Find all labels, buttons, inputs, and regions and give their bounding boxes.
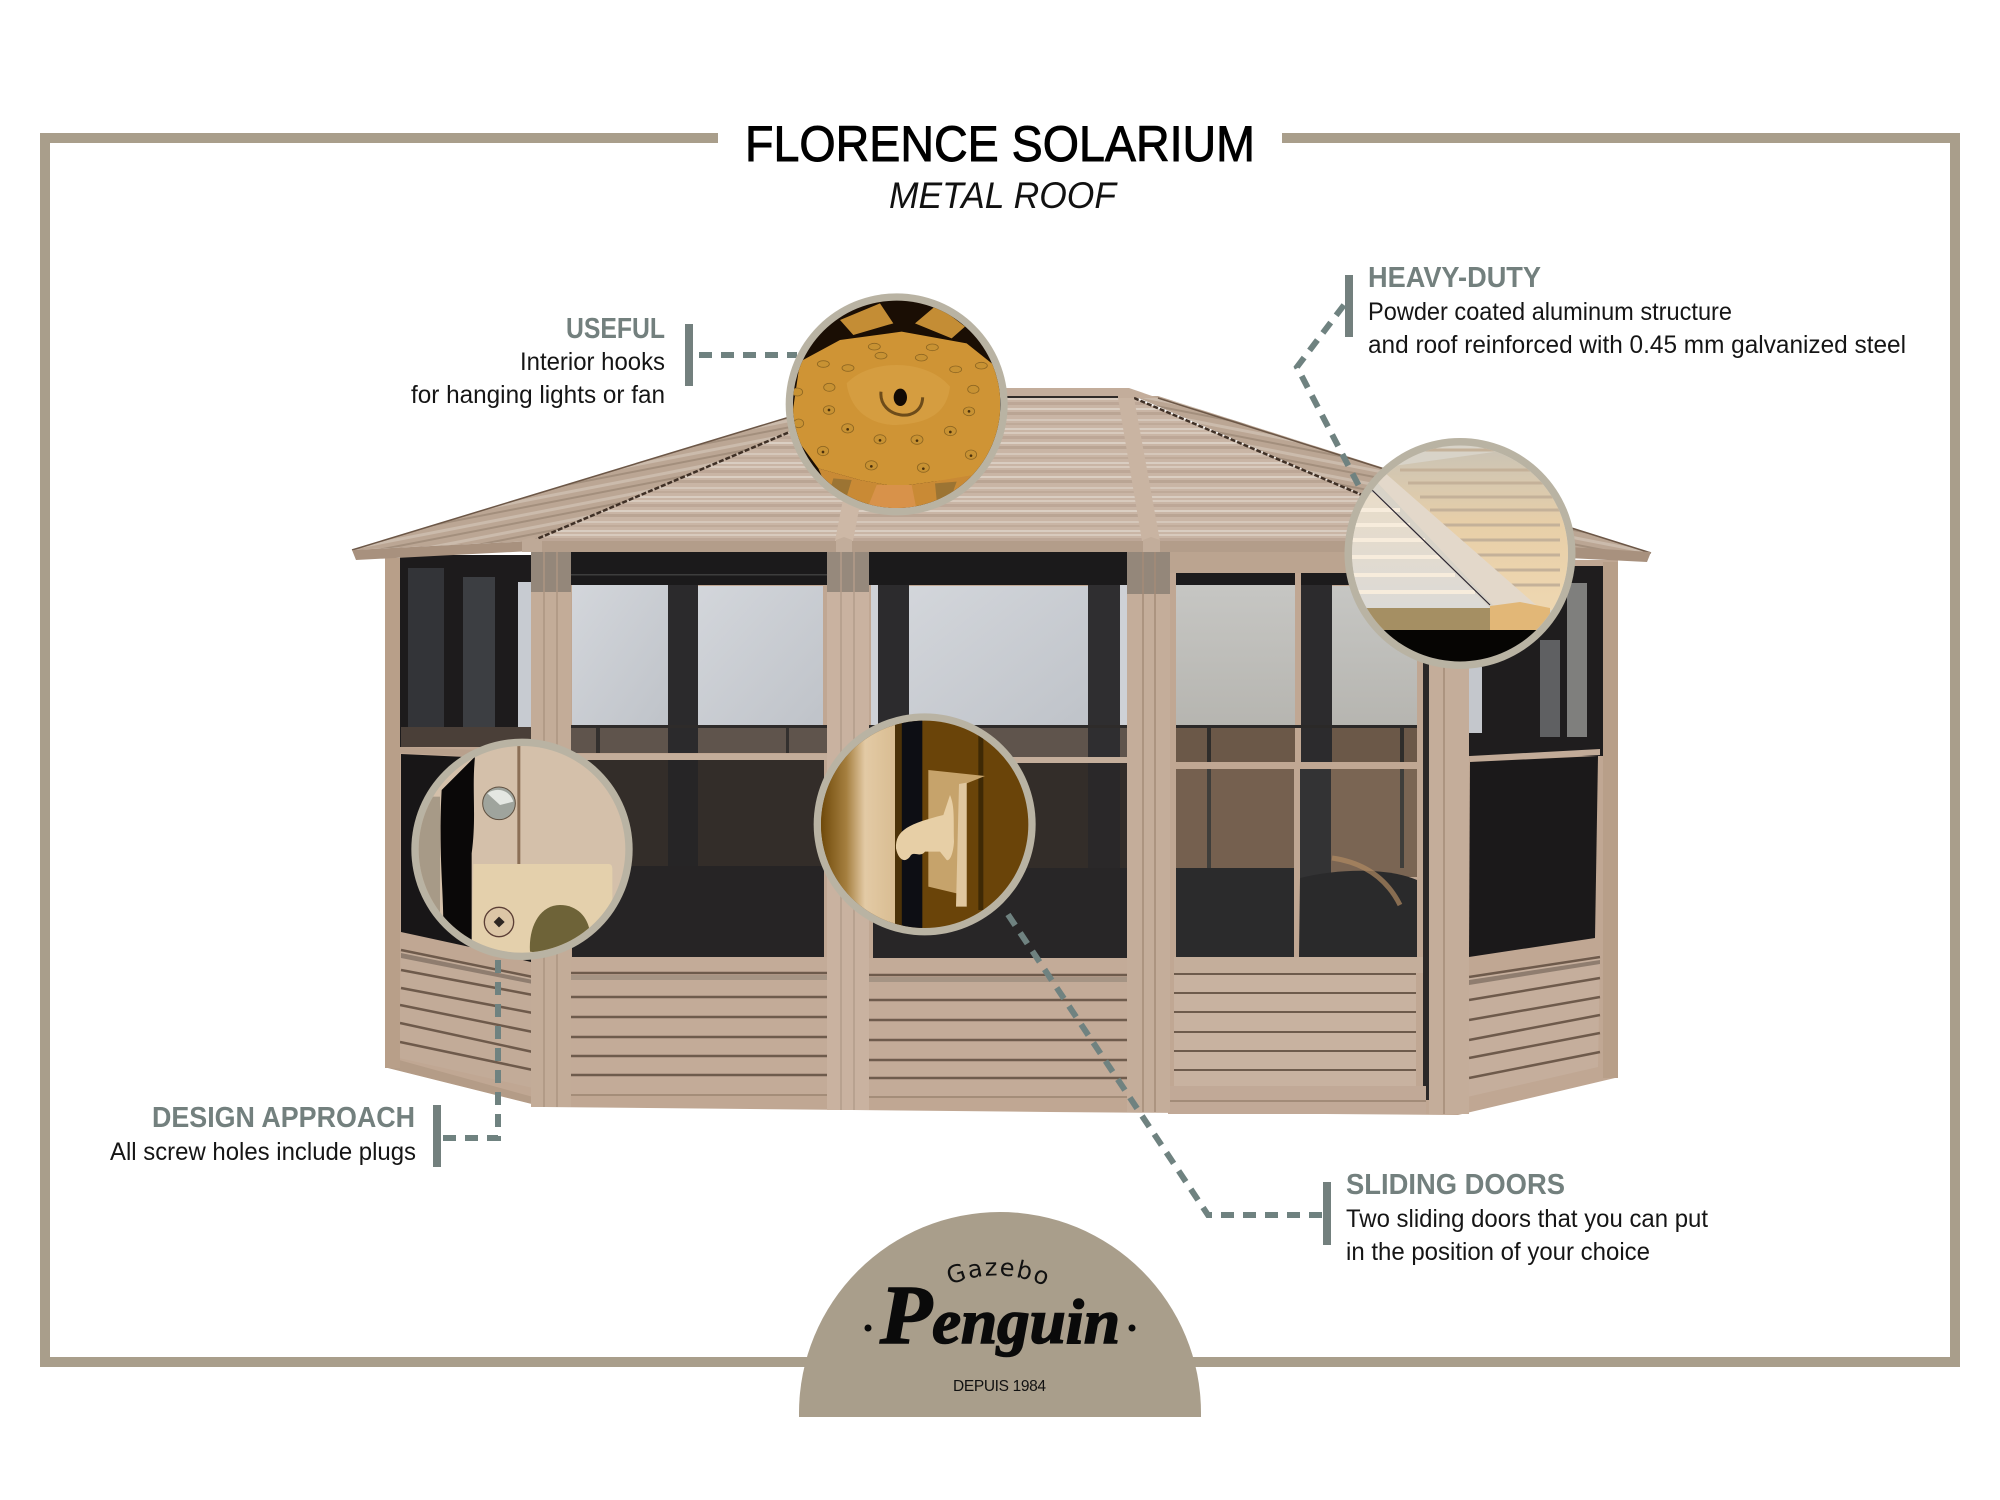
callout: heavy-duty [1297,262,1906,492]
left face windows [400,555,531,962]
outer frame [45,138,1955,1362]
sliding doors marker [1323,1182,1331,1245]
design approach body: All screw holes include plugs [110,1138,416,1166]
gazebo body base [385,558,1618,1115]
design approach heading: DESIGN APPROACH [152,1102,415,1134]
heavy-duty body: and roof reinforced with 0.45 mm galvanized steel [1368,331,1906,359]
gazebo wordmark [950,1275,1052,1289]
gazebo illustration [352,388,1651,1115]
front panel 1 window [571,552,827,957]
title: FLORENCE SOLARIUM [745,116,1255,172]
right face windows [1469,566,1603,957]
useful marker [685,324,693,386]
posts [385,552,1618,1114]
detail circle: screw plug [411,738,633,960]
callout: useful [411,313,797,409]
logo badge [799,1212,1201,1417]
left face louvers [388,950,544,1107]
front panel 1 louvers [571,957,828,1095]
sliding doors body: Two sliding doors that you can put [1346,1205,1708,1233]
useful body: for hanging lights or fan [411,381,665,409]
logo dots [864,1324,1136,1332]
logo badge: Gazebo [948,1260,1048,1284]
subtitle: METAL ROOF [889,175,1118,216]
sliding doors body: in the position of your choice [1346,1238,1650,1266]
heavy-duty heading: HEAVY-DUTY [1368,262,1541,294]
sliding door [1168,552,1429,1114]
useful body [411,348,665,409]
useful heading: USEFUL [566,313,665,345]
heavy-duty body: Powder coated aluminum structure [1368,298,1732,326]
heavy-duty marker [1345,275,1353,337]
detail circle: door latch [814,713,1036,936]
penguin wordmark: Penguin [879,1269,1120,1362]
right face louvers [1467,955,1600,1097]
heavy-duty connector [1297,305,1362,492]
sliding doors body [1346,1205,1708,1266]
front panel 2 window [869,552,1128,958]
detail circle: heavy-duty roof [1340,438,1580,670]
badge shape [799,1212,1201,1417]
useful body: Interior hooks [520,348,665,376]
depuis 1984: DEPUIS 1984 [953,1378,1046,1395]
design approach marker [433,1105,441,1167]
sliding doors connector [1005,910,1322,1215]
heavy-duty body [1368,298,1906,359]
useful connector [699,352,797,358]
callout: sliding doors [1005,910,1708,1266]
sliding doors heading: SLIDING DOORS [1346,1169,1565,1201]
front panel 2 louvers [869,958,1128,1097]
detail circle: interior hook [786,293,1008,516]
design approach connector [443,958,498,1138]
roof [352,388,1651,562]
callout: design approach [110,958,498,1167]
